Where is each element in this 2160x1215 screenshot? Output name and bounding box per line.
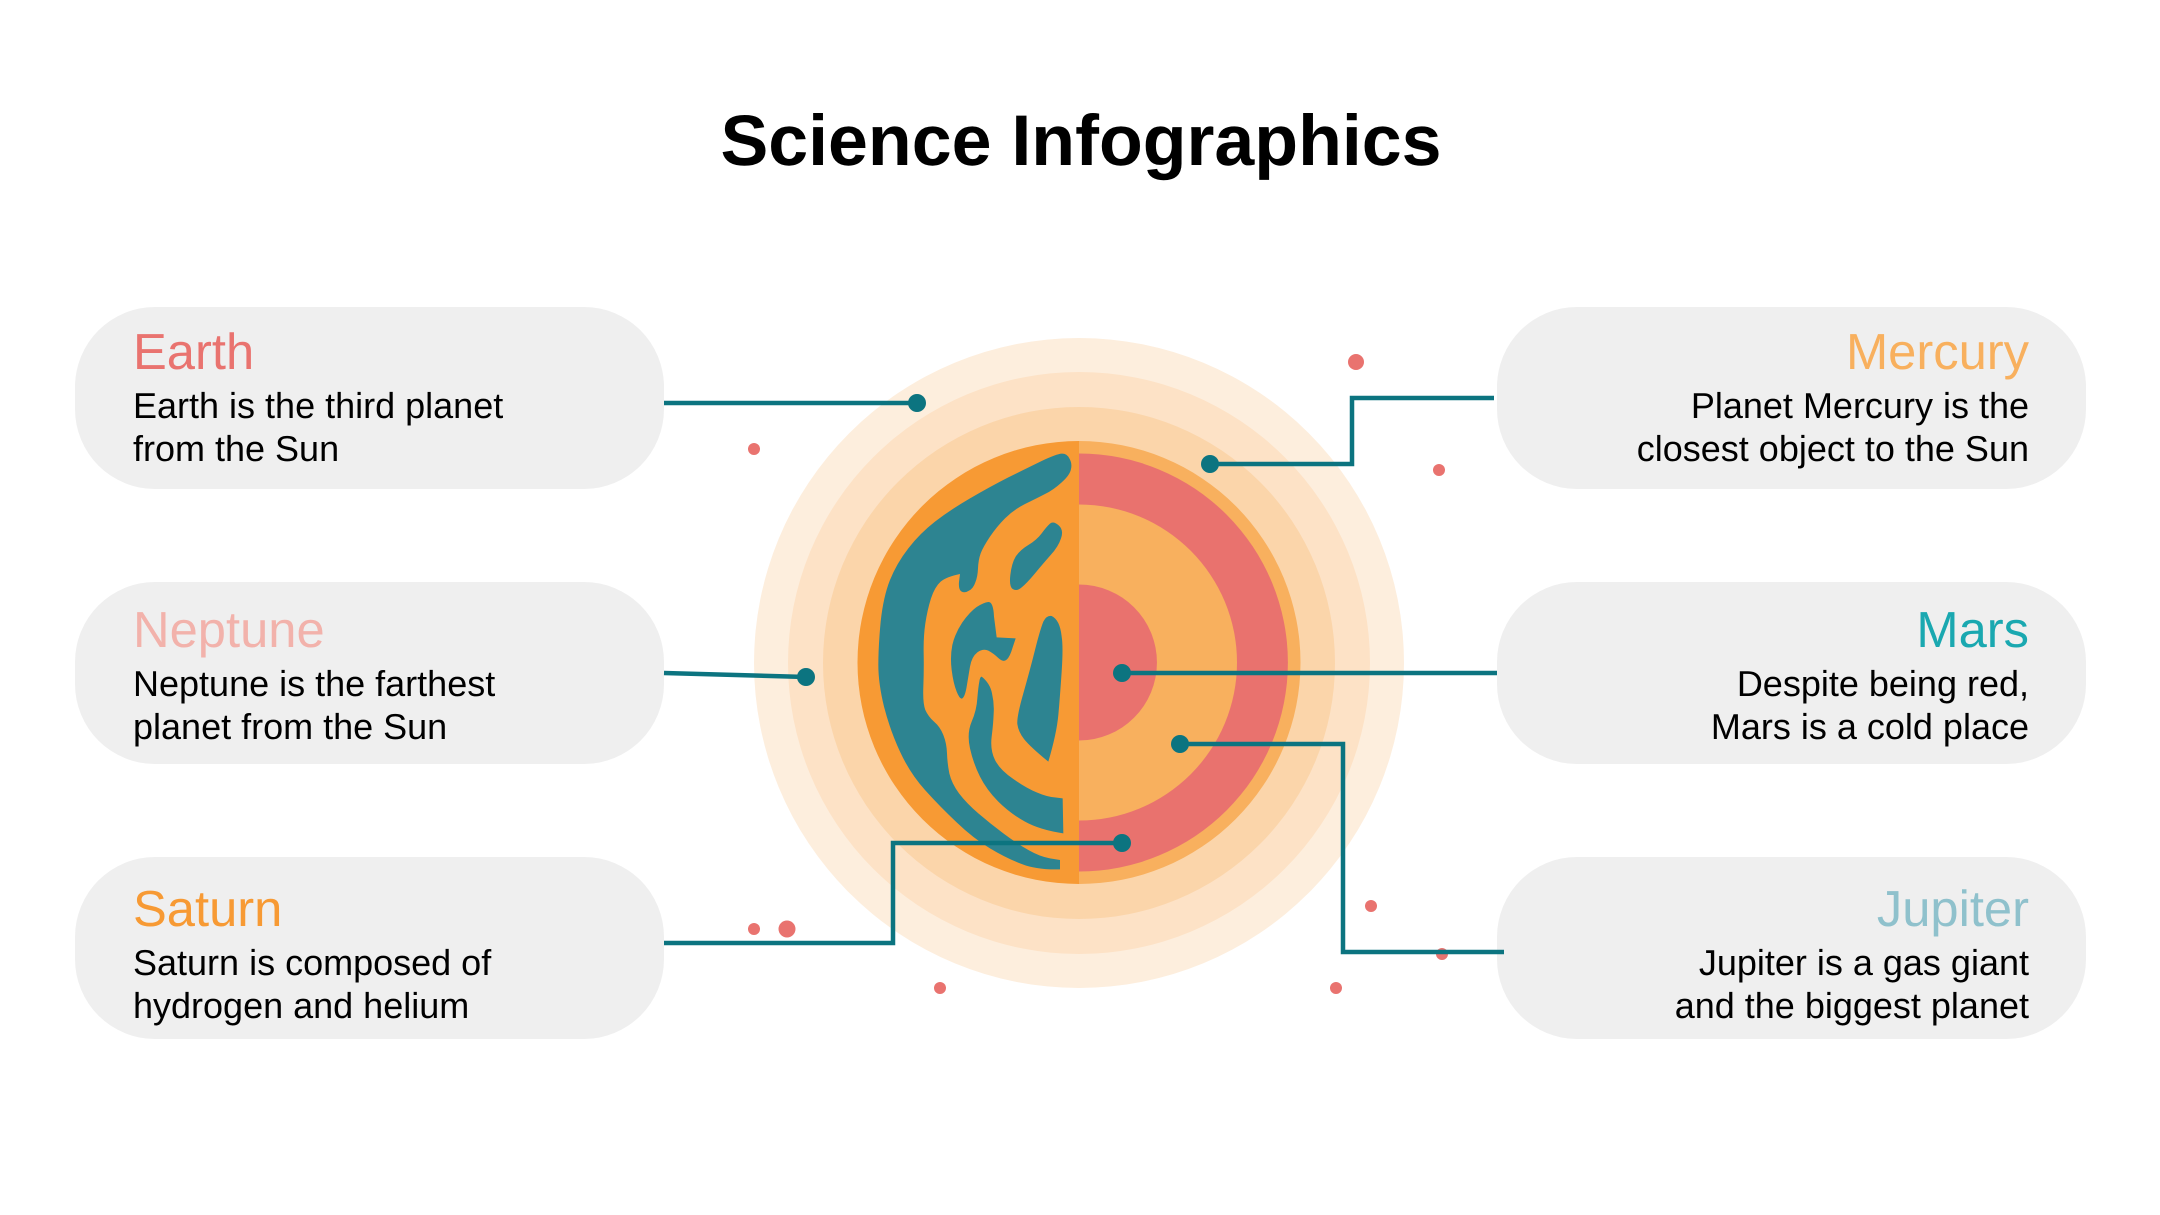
connector: Jupiter [1171,735,1504,952]
connector: Neptune [664,668,815,686]
connector: Earth [664,394,926,412]
panel: Mars: Despite being red, [1737,663,2029,704]
decorative particles [748,354,1448,994]
panel: Neptune: planet from the Sun [133,706,447,747]
panel: Earth: Earth is the third planet [133,385,503,426]
panel: Jupiter [1497,857,2086,1039]
panel: Earth: Earth [133,323,254,380]
panel: Jupiter: Jupiter [1877,880,2029,937]
panel: Mars: Mars is a cold place [1711,706,2029,747]
connector: Saturn [664,834,1131,943]
panel: Saturn: Saturn [133,880,282,937]
panel: Saturn: Saturn is composed of [133,942,492,983]
connector: Mercury [1201,398,1494,473]
panel: Jupiter: Jupiter is a gas giant [1699,942,2029,983]
panel: Mars: Mars [1916,601,2029,658]
connector: Mars [1113,664,1497,682]
panel: Mercury: Planet Mercury is the [1691,385,2029,426]
panel: Mercury: Mercury [1846,323,2030,380]
panel: Neptune: Neptune is the farthest [133,663,495,704]
panel: Saturn [75,857,664,1039]
panel: Neptune: Neptune [133,601,325,658]
panel: Neptune [75,582,664,764]
title: Science Infographics [720,101,1442,181]
planet: cross-section core half [1079,441,1301,884]
panel: Mercury: closest object to the Sun [1637,428,2029,469]
panel: Saturn: hydrogen and helium [133,985,469,1026]
panel: Earth [75,307,664,489]
panel: Jupiter: and the biggest planet [1675,985,2029,1026]
planet rings [754,338,1404,988]
panel: Earth: from the Sun [133,428,339,469]
planet: surface half with continents [858,441,1079,884]
panel: Mars [1497,582,2086,764]
panel: Mercury [1497,307,2086,489]
